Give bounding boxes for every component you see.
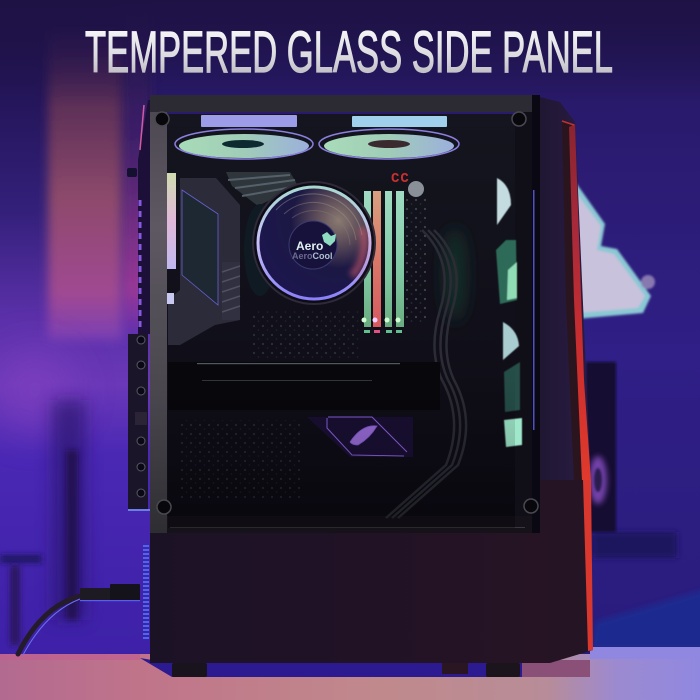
RAM modules: [362, 191, 404, 333]
left side LED strip: [167, 173, 176, 304]
right side intake fans: [496, 178, 522, 447]
power cables: [386, 230, 466, 518]
debug LED display: CC: [391, 171, 410, 187]
graphics card: [168, 362, 440, 410]
AIO pump with logo: [244, 182, 375, 304]
rear lower vents: [143, 545, 149, 640]
rear panel ports: [127, 100, 150, 334]
PC case: [127, 95, 593, 677]
motherboard heatsinks: [168, 172, 298, 345]
ROG chipset logo: [307, 417, 413, 457]
rear IO bracket strip: [128, 334, 150, 511]
neon triangle sign: [574, 180, 655, 319]
glass side panel: [150, 95, 532, 533]
silver capacitor: [408, 181, 424, 197]
AIO pump with logo: AeroCool: [292, 251, 333, 261]
AIO pump with logo: Aero: [296, 239, 323, 253]
power cable: [18, 584, 140, 655]
speaker: [586, 362, 616, 532]
top radiator fans: [175, 115, 459, 159]
front panel: [532, 95, 593, 663]
glass darkening: [168, 360, 515, 528]
bottom PSU shroud: [150, 533, 548, 663]
motherboard detail: [180, 195, 465, 500]
panel screws: [155, 112, 538, 514]
table top: [0, 647, 700, 700]
case feet: [172, 663, 520, 677]
